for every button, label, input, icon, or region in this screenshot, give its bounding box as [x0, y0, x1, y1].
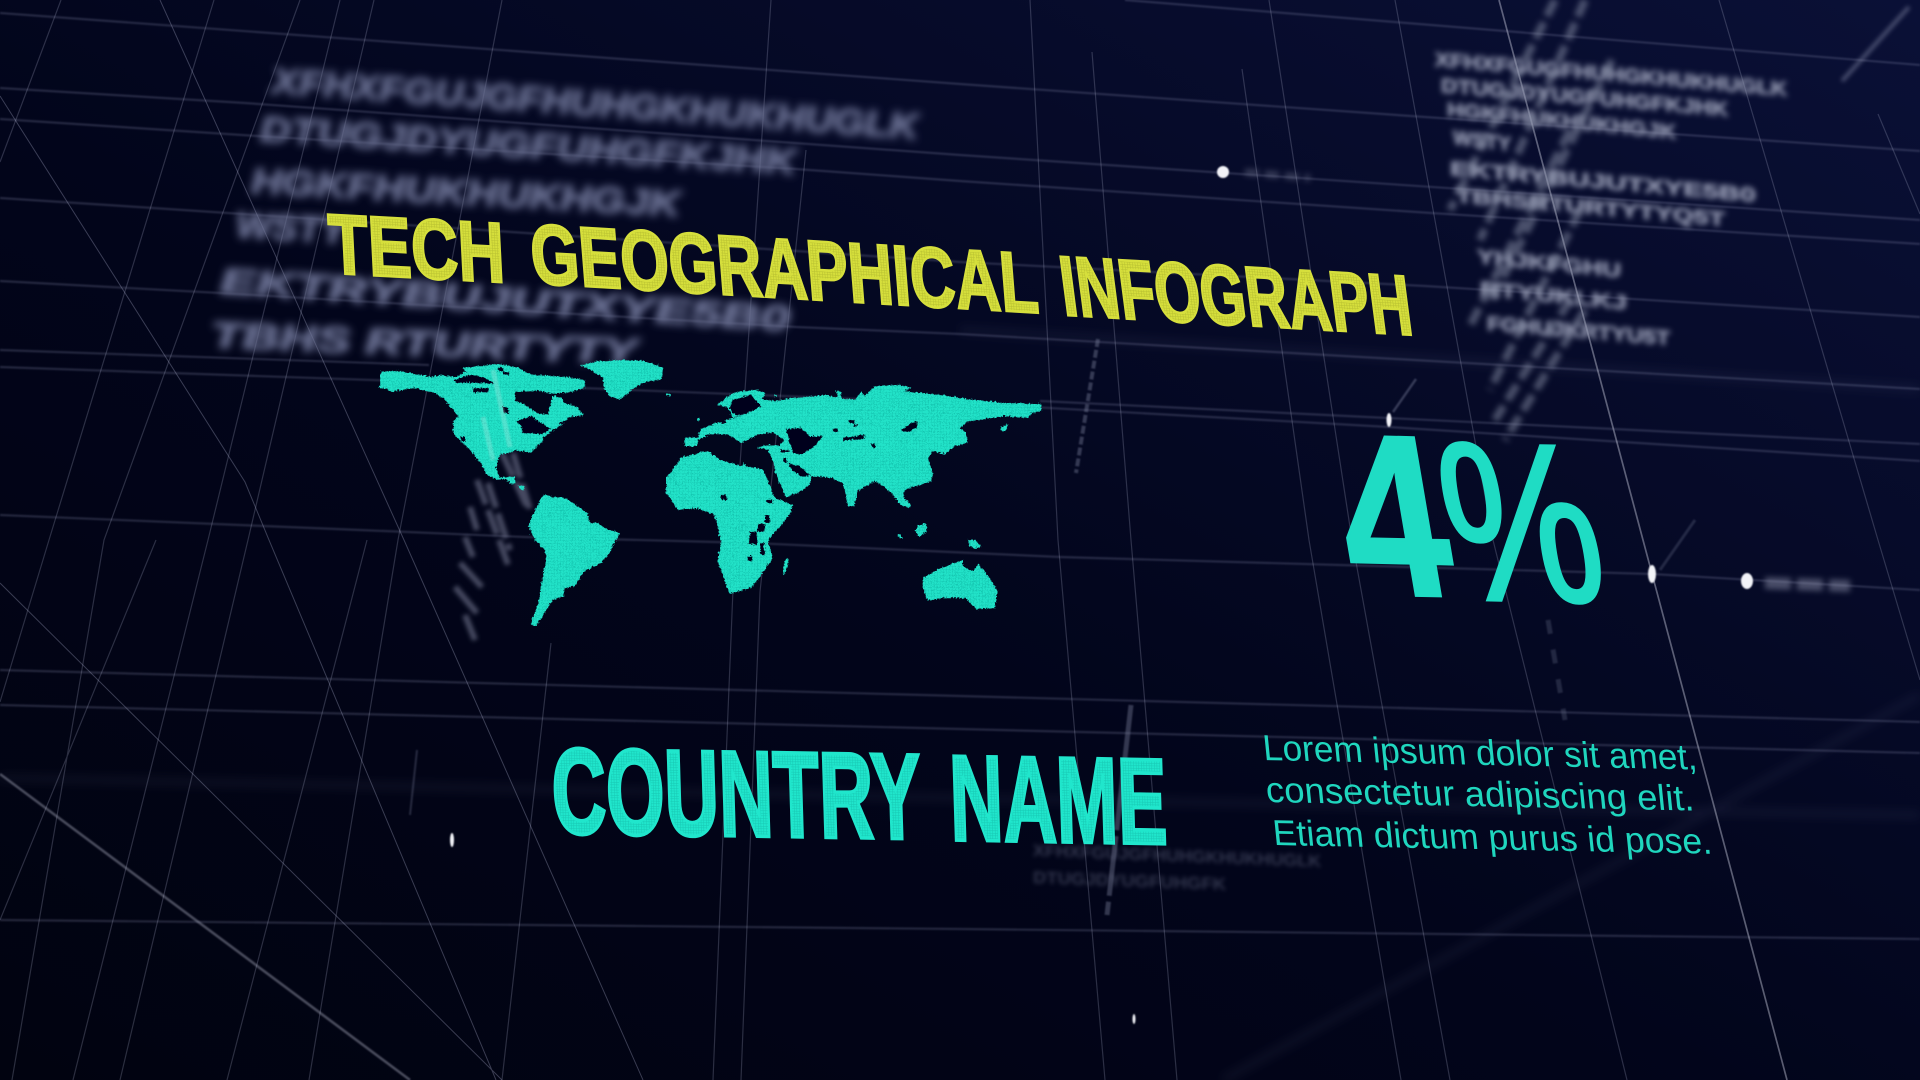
blurred ghost text: top left block: WSTY: [236, 204, 349, 252]
faint ghost text below country name: [1033, 841, 1322, 894]
stripes over north america: [483, 370, 510, 460]
blurred ghost text: top left block: TBHS RTURTYTY: [211, 314, 641, 372]
blurred ghost text: top right block: RTYUKLKJ: [1480, 278, 1627, 315]
blurred stripes behind map: [455, 453, 530, 640]
blurred ghost text: top right block: YHJKFGHU: [1477, 246, 1621, 282]
map: south america: [527, 493, 618, 625]
thin streak marks: [410, 339, 1695, 915]
map: americas: [378, 359, 669, 625]
percentage value: 4: [1319, 387, 1467, 646]
map: eurasia waters: [720, 393, 917, 475]
percentage value: %: [1421, 395, 1620, 651]
description paragraph: [1261, 727, 1714, 862]
map: africa lakes: [719, 493, 772, 560]
faint ghost text below country name: DTUGJDYUGFUHGFK: [1033, 868, 1227, 894]
blurred ghost text: top left block: XFHXFGUJGFHUHGKHUKHUGLK: [270, 60, 921, 147]
blurred ghost text: top left block: EKTRYBUJUTXYE5B0: [220, 260, 790, 339]
blurred ghost text: top left block: [211, 60, 921, 372]
title: tech geographical infograph: [326, 197, 1417, 354]
map: north america waters: [453, 366, 565, 440]
description paragraph: Etiam dictum purus id pose.: [1271, 812, 1714, 862]
blurred ghost text: top right block: EKTRYBUJUTXYE5B0: [1450, 158, 1756, 207]
blurred ghost text: top right block: DTUGJDYUGFUHGFKJHK: [1441, 75, 1729, 121]
map: eurasia: [683, 383, 1041, 507]
map: australia: [922, 558, 997, 608]
blurred ghost text: top right block: FGHUJKRTYU5T: [1487, 313, 1671, 350]
title: tech geographical infograph: TECH: [326, 197, 507, 301]
blurred ghost text: top right block: WSTY: [1453, 127, 1512, 156]
blurred ghost text: top right block: TBHSRTURTYTYQ5T: [1456, 185, 1726, 231]
map: greenland: [579, 359, 669, 398]
blurred ghost text: top right block: XFHXFGUGFHUHGKHUKHUGLK: [1435, 49, 1788, 101]
blurred ghost text: top left block: HGKFHUKHUKHGJK: [251, 160, 684, 224]
country name: COUNTRY: [550, 723, 923, 865]
title: tech geographical infograph: GEOGRAPHICAL: [527, 207, 1042, 332]
blurred ghost text: top right block: HGKFHUKHUKHGJK: [1447, 99, 1677, 144]
blurred ghost text: top left block: DTUGJDYUGFUHGFKJHK: [260, 108, 800, 182]
percentage value: [1319, 387, 1620, 651]
description paragraph: consectetur adipiscing elit.: [1264, 769, 1696, 819]
world map: [378, 359, 1041, 625]
description paragraph: Lorem ipsum dolor sit amet,: [1261, 727, 1699, 778]
country name: NAME: [948, 730, 1169, 870]
blurred ghost text: top right block: [1435, 49, 1788, 350]
glowing light points: [450, 166, 1850, 1024]
blurred diagonal stripes: top right: [1450, 0, 1612, 440]
title: tech geographical infograph: INFOGRAPH: [1054, 239, 1417, 354]
map: africa: [665, 450, 792, 593]
map: islands: [665, 393, 1007, 575]
map: old world: [665, 383, 1041, 608]
faint ghost text below country name: XFHXFGUJGFHUHGKHUKHUGLK: [1033, 841, 1322, 871]
map: north america: [378, 363, 583, 489]
